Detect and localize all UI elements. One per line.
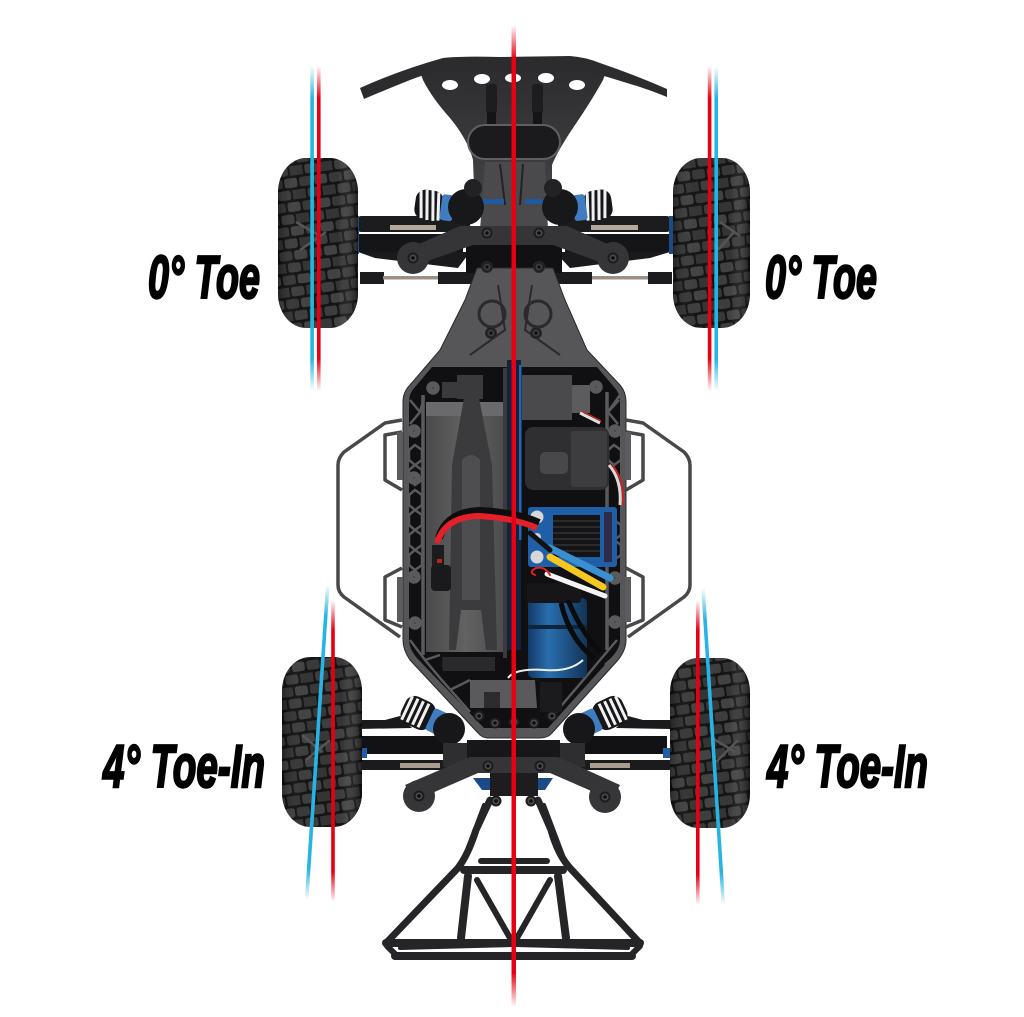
rear arms (358, 716, 670, 770)
chassis tub (403, 268, 626, 738)
tire: front left (278, 158, 358, 328)
tire: front right (673, 158, 750, 328)
receiver box (525, 427, 623, 505)
label: front left: 0° Toe (148, 244, 260, 311)
bumper holes (442, 73, 585, 90)
battery tray (426, 368, 507, 669)
front bumper bar (360, 56, 667, 99)
rear crossbar and bump stops (403, 740, 621, 813)
rear bumper (386, 800, 640, 956)
rear left alignment lines (305, 585, 335, 902)
chassis nose detail (470, 262, 560, 360)
ESC (528, 507, 617, 567)
motor (508, 583, 600, 678)
nerf bars (338, 420, 690, 637)
label: rear right: 4° Toe-In (766, 733, 928, 800)
side rail ribs (408, 382, 621, 712)
front right alignment lines (708, 66, 718, 391)
front crossbar (397, 226, 629, 274)
bumper posts and intake (468, 84, 560, 230)
chassis interior (409, 367, 620, 728)
front shocks (413, 179, 614, 225)
tire: rear right (670, 658, 750, 828)
front bumper plate (418, 66, 608, 215)
center line (512, 25, 516, 1007)
rear right alignment lines (696, 588, 725, 905)
front tie rods and arms (352, 199, 676, 284)
ESC wires (530, 533, 610, 596)
rear gearbox (443, 657, 562, 728)
rear shocks (397, 693, 631, 745)
label: front right: 0° Toe (765, 244, 877, 311)
front left alignment lines (310, 66, 321, 391)
battery strap (449, 398, 497, 650)
battery red wire (431, 511, 539, 591)
label: rear left: 4° Toe-In (102, 733, 265, 800)
center spine (507, 360, 521, 650)
servo (522, 375, 601, 423)
tire: rear left (282, 657, 362, 827)
